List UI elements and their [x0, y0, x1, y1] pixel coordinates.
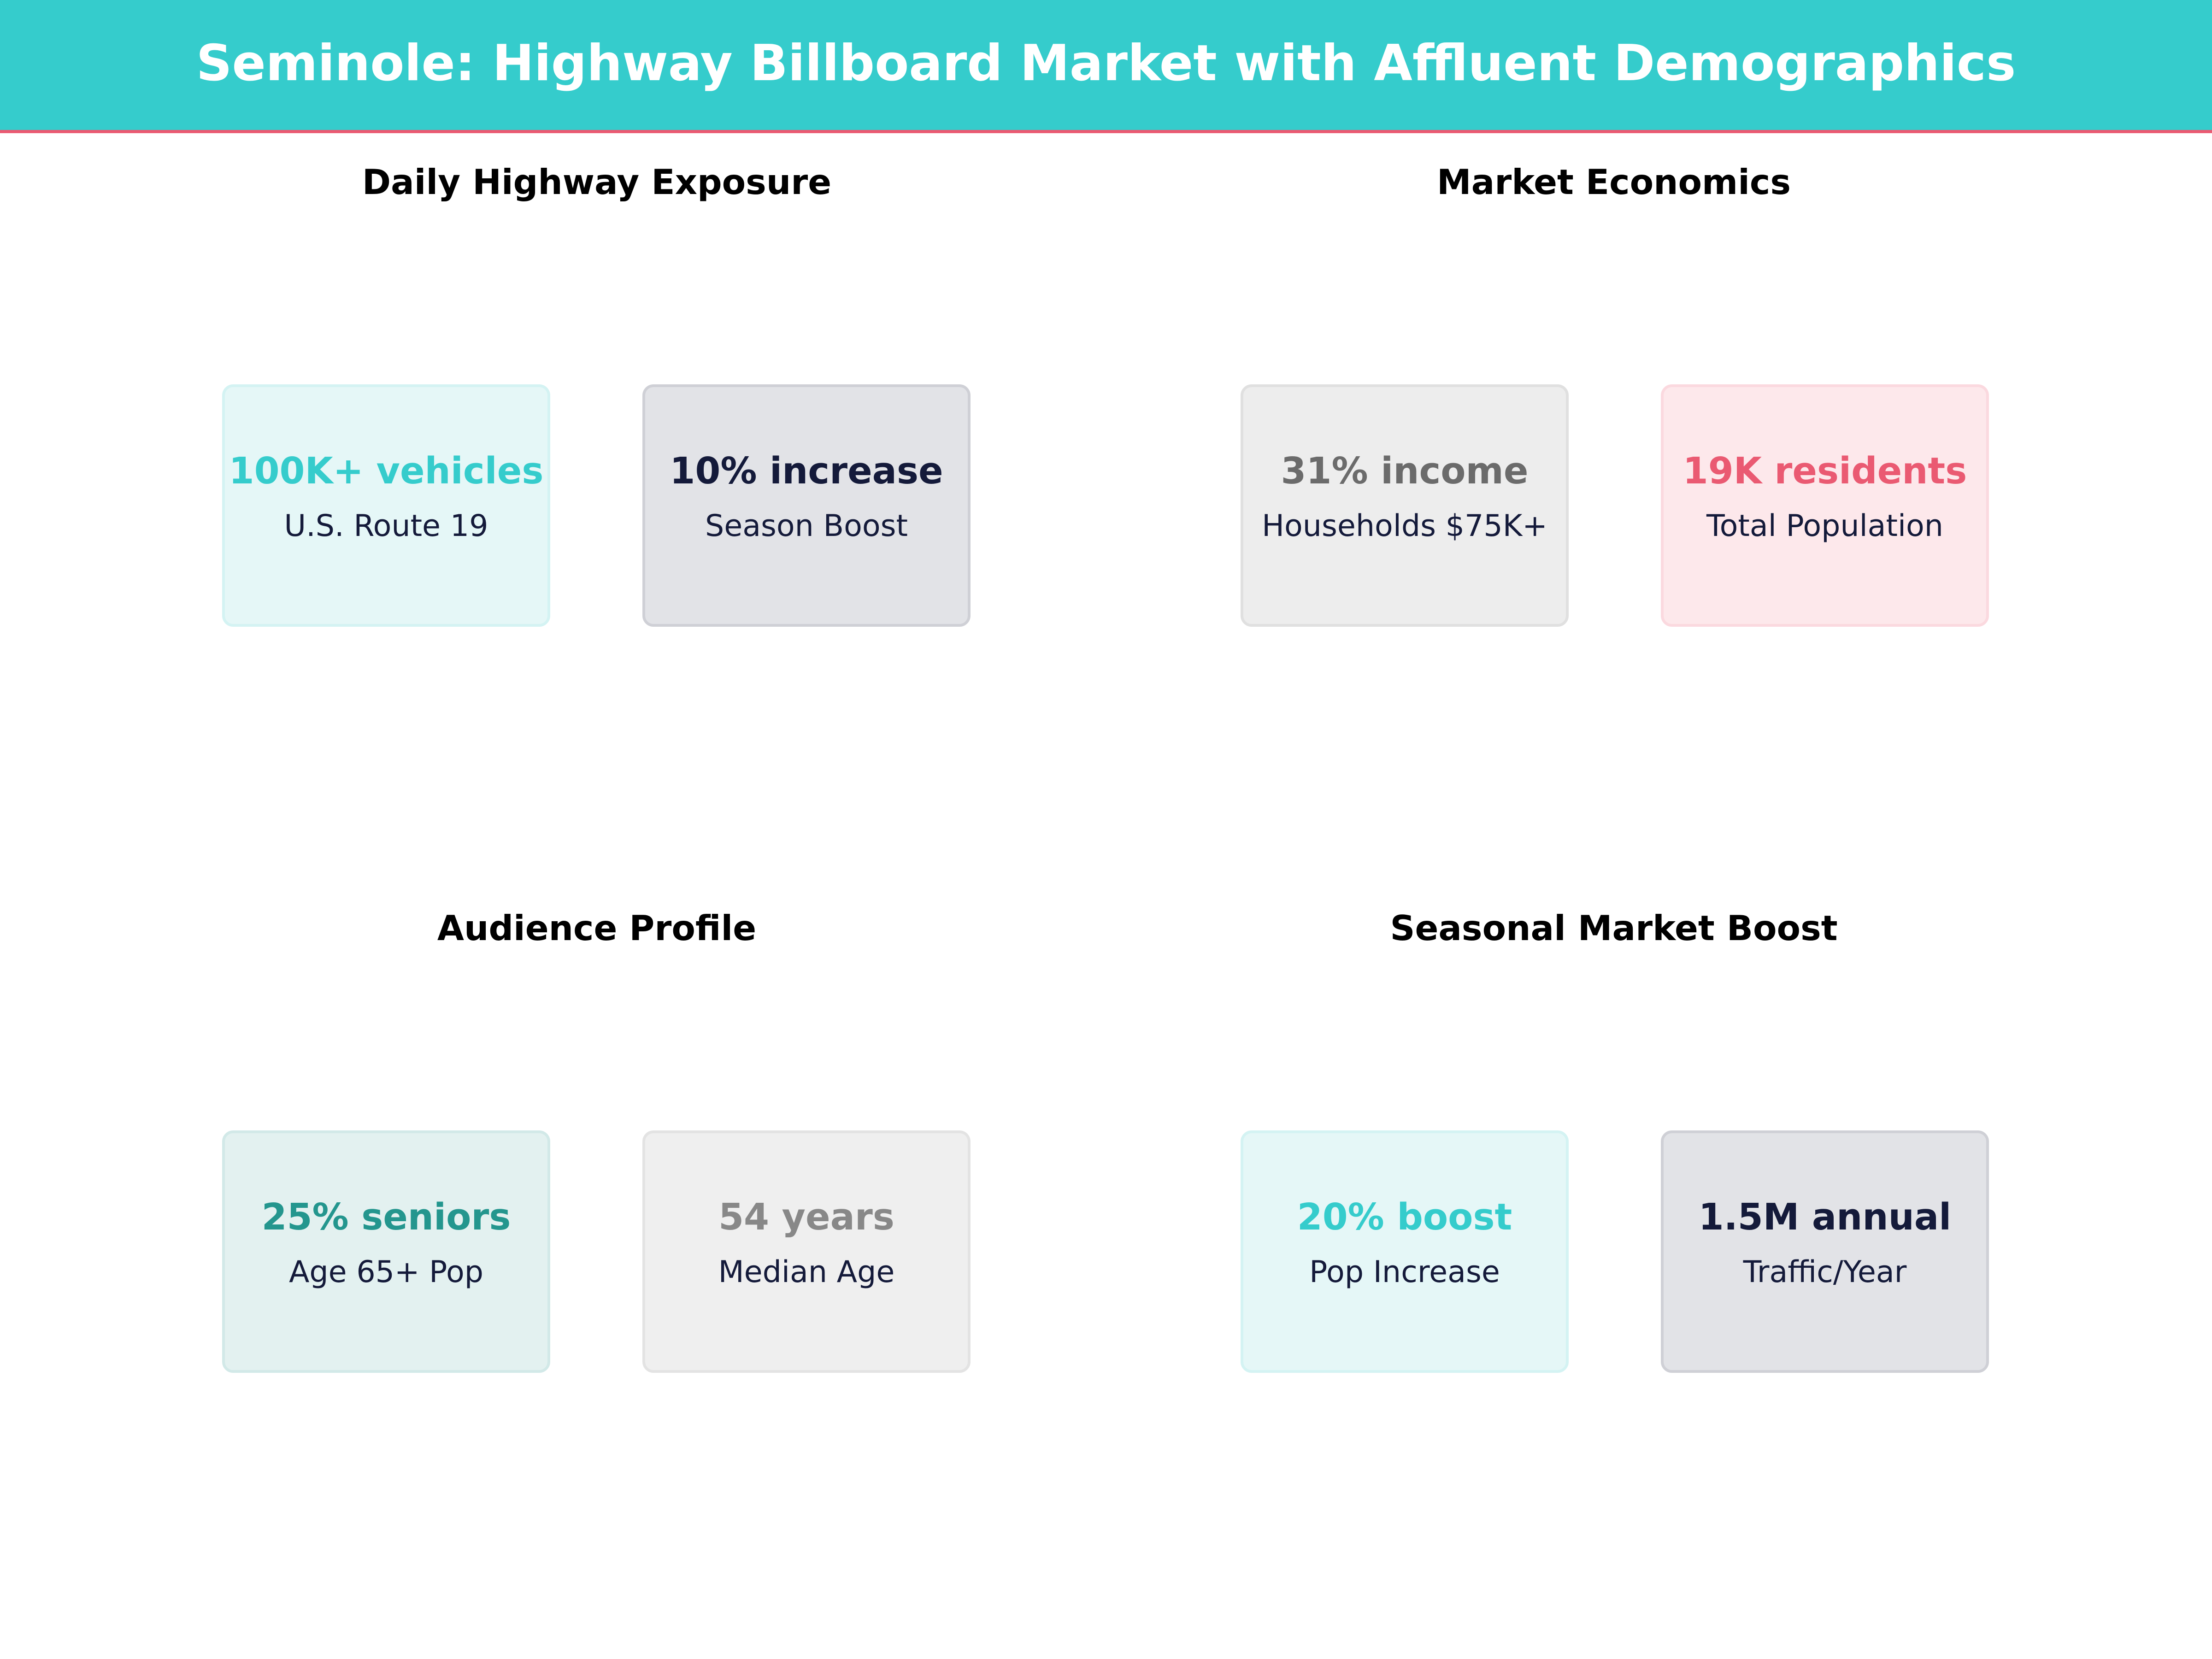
card: 54 years — [642, 1130, 971, 1373]
card: 31% income: 31% income — [1281, 450, 1528, 492]
card: 10% increase: Season Boost — [705, 509, 908, 543]
card: 31% income: Households $75K+ — [1262, 509, 1547, 543]
card: 25% seniors: Age 65+ Pop — [289, 1255, 483, 1289]
card: 54 years: Median Age — [718, 1255, 894, 1289]
card: 100K+ vehicles: 100K+ vehicles — [229, 450, 543, 492]
heading: Audience Profile: Audience Profile — [437, 908, 756, 948]
card: 19K residents — [1661, 384, 1989, 627]
card: 20% boost — [1241, 1130, 1569, 1373]
card: 20% boost: 20% boost — [1297, 1196, 1512, 1238]
card: 25% seniors: 25% seniors — [262, 1196, 511, 1238]
card: 20% boost: Pop Increase — [1309, 1255, 1500, 1289]
card: 10% increase — [642, 384, 971, 627]
card: 1.5M annual: 1.5M annual — [1699, 1196, 1951, 1238]
card: 25% seniors — [222, 1130, 550, 1373]
heading: Market Economics: Market Economics — [1437, 162, 1791, 202]
header banner: Seminole: Highway Billboard Market with Affluent Demographics — [196, 35, 2016, 92]
card: 100K+ vehicles: U.S. Route 19 — [284, 509, 488, 543]
header banner — [0, 0, 2212, 133]
heading: Daily Highway Exposure: Daily Highway Exposure — [362, 162, 831, 202]
card: 31% income — [1241, 384, 1569, 627]
card: 100K+ vehicles — [222, 384, 550, 627]
card: 19K residents: Total Population — [1706, 509, 1943, 543]
heading: Seasonal Market Boost: Seasonal Market Boost — [1390, 908, 1838, 948]
card: 19K residents: 19K residents — [1683, 450, 1967, 492]
card: 54 years: 54 years — [718, 1196, 894, 1238]
card: 10% increase: 10% increase — [670, 450, 943, 492]
card: 1.5M annual — [1661, 1130, 1989, 1373]
card: 1.5M annual: Traffic/Year — [1743, 1255, 1906, 1289]
